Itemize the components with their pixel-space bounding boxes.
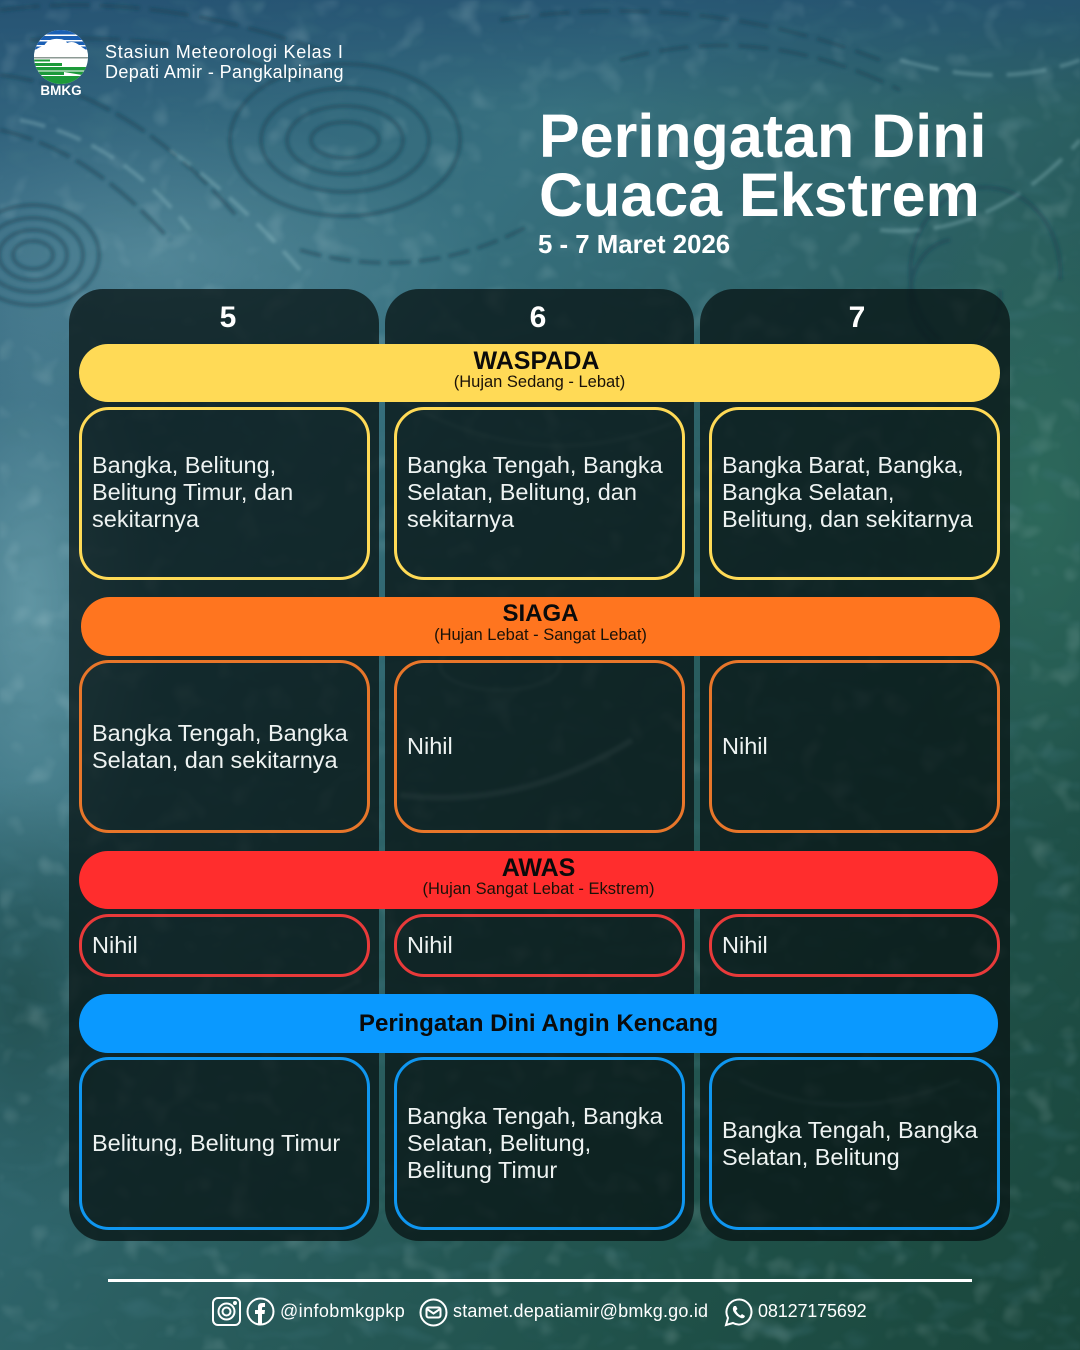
logo: BMKG: BMKG bbox=[40, 83, 82, 98]
date subtitle: 5 - 7 Maret 2026 bbox=[538, 231, 730, 259]
card: waspada day 5: sekitarnya bbox=[92, 506, 199, 532]
card: awas day 7: Nihil bbox=[722, 932, 768, 958]
icon: whatsapp bbox=[724, 1298, 752, 1326]
station name bbox=[105, 42, 344, 82]
card: awas day 7 bbox=[709, 914, 1000, 977]
email address: stamet.depatiamir@bmkg.go.id bbox=[453, 1301, 708, 1321]
social handle: @infobmkgpkp bbox=[280, 1301, 405, 1321]
banner: siaga: (Hujan Lebat - Sangat Lebat) bbox=[434, 626, 647, 644]
day label 7: 7 bbox=[849, 301, 865, 334]
card: waspada day 7: Belitung, dan sekitarnya bbox=[722, 506, 973, 532]
icon: instagram bbox=[212, 1297, 241, 1326]
card: siaga day 7 bbox=[709, 660, 1000, 833]
card: waspada day 6: sekitarnya bbox=[407, 506, 514, 532]
card: siaga day 5: Bangka Tengah, Bangka bbox=[92, 720, 348, 746]
card: angin day 5: Belitung, Belitung Timur bbox=[92, 1130, 340, 1156]
banner: siaga: SIAGA bbox=[502, 600, 578, 627]
banner: waspada: (Hujan Sedang - Lebat) bbox=[454, 373, 625, 391]
station name: Depati Amir - Pangkalpinang bbox=[105, 62, 344, 82]
banner: waspada: WASPADA bbox=[474, 347, 599, 375]
card: waspada day 7 bbox=[709, 407, 1000, 580]
banner: angin kencang: Peringatan Dini Angin Kencang bbox=[359, 1010, 718, 1037]
card: waspada day 5 bbox=[79, 407, 370, 580]
card: waspada day 7: Bangka Selatan, bbox=[722, 479, 894, 505]
phone number: 08127175692 bbox=[758, 1301, 866, 1321]
title: Peringatan Dini bbox=[539, 102, 986, 170]
card: angin day 7: Bangka Tengah, Bangka bbox=[722, 1116, 978, 1142]
logo: BMKG bbox=[34, 30, 88, 98]
card: angin day 6 bbox=[394, 1057, 685, 1230]
card: siaga day 6 bbox=[394, 660, 685, 833]
card: angin day 6: Belitung Timur bbox=[407, 1157, 557, 1183]
title: Cuaca Ekstrem bbox=[539, 161, 980, 229]
card: angin day 7 bbox=[709, 1057, 1000, 1230]
title bbox=[539, 102, 986, 229]
panel: column day 7 bbox=[700, 289, 1010, 1241]
card: waspada day 5: Belitung Timur, dan bbox=[92, 479, 293, 505]
banner: awas: AWAS bbox=[502, 854, 575, 882]
card: angin day 6: Selatan, Belitung, bbox=[407, 1130, 591, 1156]
panel: column day 6 bbox=[385, 289, 694, 1241]
icon: email bbox=[420, 1298, 448, 1326]
card: waspada day 6: Selatan, Belitung, dan bbox=[407, 479, 637, 505]
card: siaga day 6: Nihil bbox=[407, 733, 453, 759]
card: awas day 5: Nihil bbox=[92, 932, 138, 958]
card: waspada day 5: Bangka, Belitung, bbox=[92, 452, 276, 478]
banner: awas: (Hujan Sangat Lebat - Ekstrem) bbox=[422, 880, 655, 898]
banner: waspada bbox=[79, 344, 1000, 402]
station name: Stasiun Meteorologi Kelas I bbox=[105, 42, 344, 62]
card: awas day 5 bbox=[79, 914, 370, 977]
card: siaga day 5: Selatan, dan sekitarnya bbox=[92, 746, 338, 772]
card: angin day 7: Selatan, Belitung bbox=[722, 1144, 900, 1170]
day label 5: 5 bbox=[220, 301, 236, 334]
banner: awas bbox=[79, 851, 998, 909]
panel: column day 5 bbox=[69, 289, 379, 1241]
banner: angin kencang bbox=[79, 994, 998, 1053]
footer divider bbox=[108, 1279, 972, 1282]
card: waspada day 6 bbox=[394, 407, 685, 580]
card: siaga day 5 bbox=[79, 660, 370, 833]
card: waspada day 6: Bangka Tengah, Bangka bbox=[407, 452, 663, 478]
card: waspada day 7: Bangka Barat, Bangka, bbox=[722, 452, 964, 478]
card: angin day 5 bbox=[79, 1057, 370, 1230]
icon: facebook bbox=[246, 1298, 274, 1326]
card: awas day 6: Nihil bbox=[407, 932, 453, 958]
card: awas day 6 bbox=[394, 914, 685, 977]
banner: siaga bbox=[81, 597, 1000, 656]
day label 6: 6 bbox=[530, 301, 546, 334]
card: angin day 6: Bangka Tengah, Bangka bbox=[407, 1103, 663, 1129]
card: siaga day 7: Nihil bbox=[722, 733, 768, 759]
